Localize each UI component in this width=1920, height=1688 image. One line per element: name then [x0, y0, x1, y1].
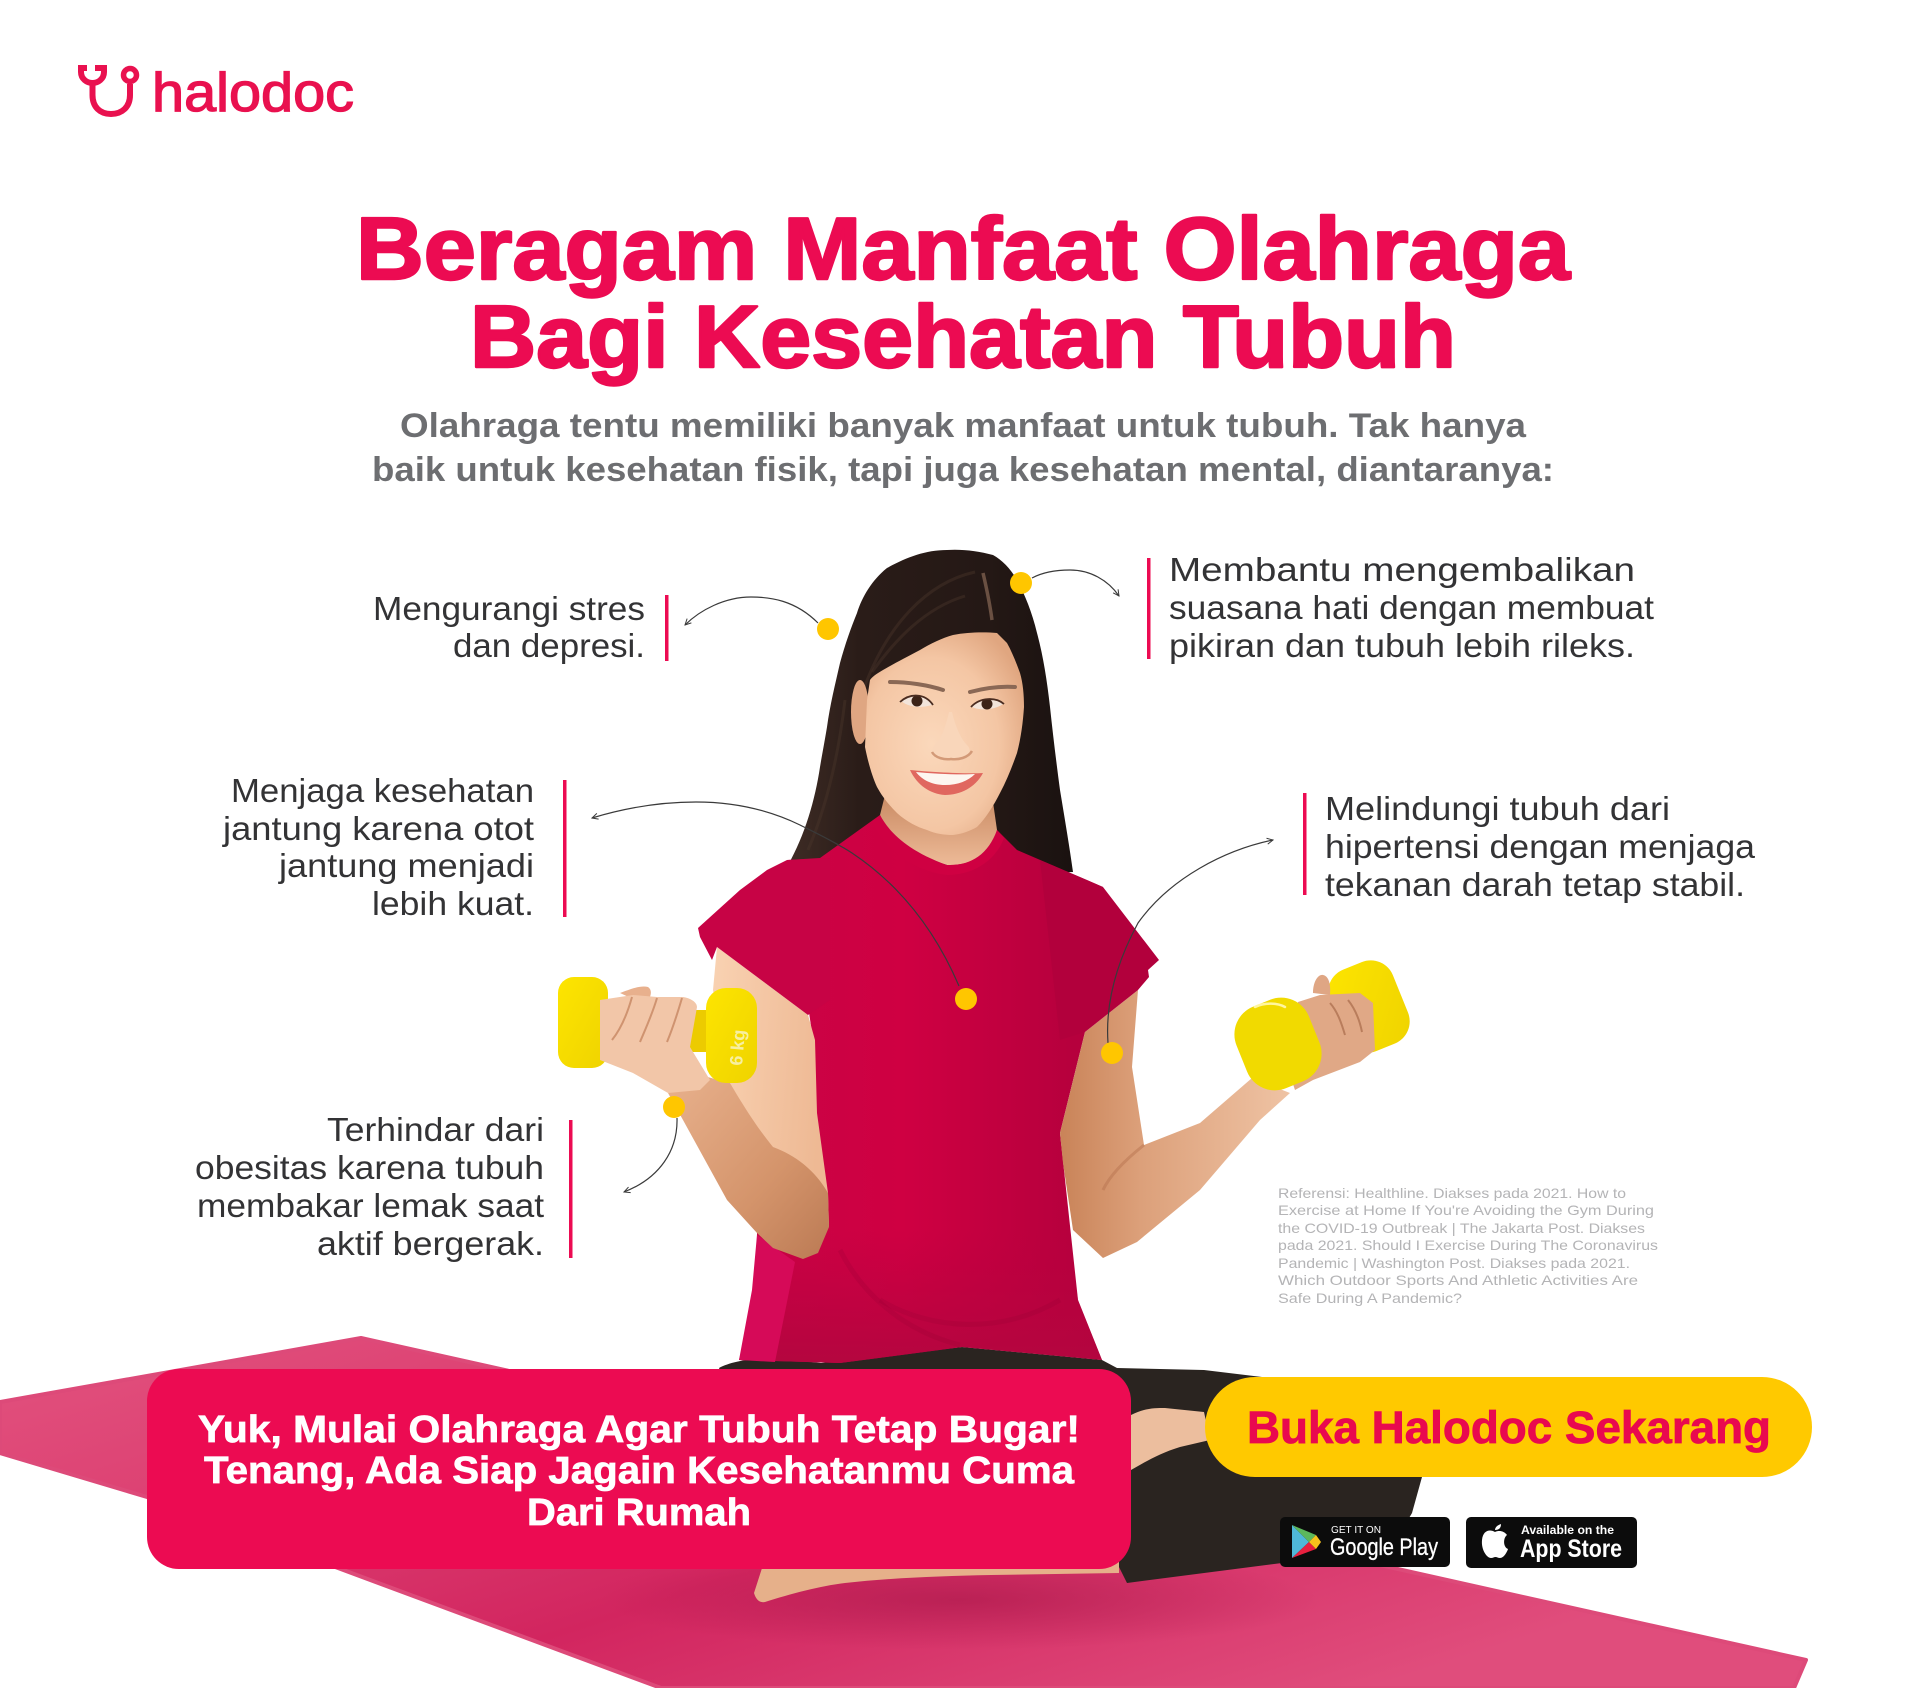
face	[865, 632, 1024, 835]
smile	[910, 770, 983, 795]
references: the COVID-19 Outbreak | The Jakarta Post. Diakses	[1278, 1220, 1645, 1236]
badge: app store: App Store	[1520, 1535, 1622, 1563]
panel: call to action	[147, 1369, 1131, 1569]
callout: hipertensi	[1101, 790, 1756, 1064]
text: Menjaga kesehatan	[231, 772, 534, 809]
text: suasana hati dengan membuat	[1169, 589, 1654, 626]
ear	[851, 680, 869, 744]
text: lebih kuat.	[372, 885, 534, 922]
badge: app store: Available on the	[1521, 1525, 1614, 1537]
sleeve right	[1040, 860, 1159, 1040]
references: Referensi: Healthline. Diakses pada 2021. How to	[1278, 1185, 1626, 1201]
nose	[932, 712, 972, 759]
yellow dot	[1010, 572, 1032, 594]
badge: google play	[1280, 1517, 1450, 1567]
sleeve left	[698, 858, 830, 1015]
text: hipertensi dengan menjaga	[1325, 828, 1756, 865]
button: buka halodoc: Buka Halodoc Sekarang	[1247, 1402, 1771, 1453]
yellow dot	[663, 1096, 685, 1118]
text	[373, 590, 645, 664]
left forearm	[668, 1075, 829, 1259]
text: Melindungi tubuh dari	[1325, 790, 1670, 827]
hair strands	[808, 572, 975, 850]
hair parting	[983, 573, 992, 620]
hand left	[600, 987, 710, 1093]
foot	[754, 1560, 1119, 1602]
callout: stres	[373, 590, 839, 664]
resting hand	[1131, 1408, 1210, 1470]
badge: google play: GET IT ON	[1331, 1524, 1381, 1536]
arrow curve	[592, 802, 959, 986]
shirt magenta side	[739, 1235, 795, 1362]
accent bar	[1147, 558, 1150, 659]
arrow curve	[1108, 840, 1273, 1043]
person	[558, 550, 1422, 1602]
references: Safe During A Pandemic?	[1278, 1290, 1462, 1306]
shirt folds	[840, 1250, 1060, 1345]
subtitle	[372, 407, 1554, 489]
arrow curve	[1032, 570, 1119, 596]
dumbbell left	[558, 977, 757, 1083]
title	[356, 199, 1571, 386]
text: aktif bergerak.	[317, 1225, 544, 1262]
pants	[719, 1347, 1422, 1583]
eyebrows	[890, 682, 1015, 692]
text: Mengurangi stres	[373, 590, 645, 627]
text	[1169, 551, 1654, 664]
right arm	[1060, 990, 1290, 1258]
right arm crease	[1103, 1145, 1144, 1190]
icon: play triangle	[1292, 1525, 1321, 1558]
text: obesitas karena tubuh	[195, 1149, 544, 1186]
callout: jantung	[222, 772, 977, 1010]
shirt body	[739, 815, 1103, 1363]
logo wordmark: halodoc	[152, 61, 354, 123]
arrow curve	[685, 597, 818, 625]
left upper arm	[713, 947, 829, 1227]
call to action text: Yuk, Mulai Olahraga Agar Tubuh Tetap Bugar!	[198, 1409, 1080, 1451]
button: buka halodoc	[1205, 1377, 1812, 1477]
subtitle: baik untuk kesehatan fisik, tapi juga kesehatan mental, diantaranya:	[372, 451, 1554, 489]
badge: app store	[1466, 1517, 1637, 1568]
yellow dot	[1101, 1042, 1123, 1064]
text	[222, 772, 534, 922]
text: Membantu mengembalikan	[1169, 551, 1635, 588]
text: membakar lemak saat	[197, 1187, 544, 1224]
icon: apple	[1482, 1524, 1508, 1558]
subtitle: Olahraga tentu memiliki banyak manfaat untuk tubuh. Tak hanya	[400, 407, 1527, 445]
text: dan depresi.	[453, 627, 645, 664]
dumbbell left: 6 kg	[726, 1029, 749, 1066]
dumbbell right far bell	[1321, 953, 1417, 1060]
references	[1278, 1185, 1658, 1306]
text: jantung menjadi	[278, 847, 534, 884]
accent bar	[1303, 793, 1306, 895]
eyes	[900, 696, 1004, 710]
collar	[872, 815, 1004, 875]
accent bar	[569, 1120, 572, 1258]
callout: suasana hati	[1010, 551, 1654, 664]
hand right	[1285, 975, 1375, 1090]
callout: obesitas	[195, 1096, 685, 1262]
call to action text	[198, 1409, 1080, 1534]
references: Pandemic | Washington Post. Diakses pada 2021.	[1278, 1255, 1630, 1271]
title: Bagi Kesehatan Tubuh	[470, 287, 1456, 386]
yellow dot	[955, 988, 977, 1010]
dumbbell right near bell	[1225, 989, 1331, 1099]
hair back	[788, 550, 1073, 880]
neck	[880, 795, 997, 865]
call to action text: Tenang, Ada Siap Jagain Kesehatanmu Cuma	[204, 1450, 1075, 1492]
references: Exercise at Home If You're Avoiding the Gym During	[1278, 1202, 1654, 1218]
text	[1325, 790, 1756, 903]
text: Terhindar dari	[327, 1111, 544, 1148]
text: tekanan darah tetap stabil.	[1325, 866, 1745, 903]
text	[195, 1111, 544, 1262]
title: Beragam Manfaat Olahraga	[356, 199, 1571, 298]
accent bar	[563, 780, 566, 917]
text: jantung karena otot	[222, 810, 534, 847]
references: Which Outdoor Sports And Athletic Activities Are	[1278, 1272, 1638, 1288]
yoga mat	[0, 1338, 1806, 1688]
icon: stethoscope	[81, 68, 136, 114]
shirt lower shade	[739, 1230, 1102, 1363]
text: pikiran dan tubuh lebih rileks.	[1169, 627, 1635, 664]
arrow curve	[624, 1118, 677, 1192]
accent bar	[665, 595, 668, 661]
logo: halodoc	[81, 61, 354, 123]
call to action text: Dari Rumah	[527, 1492, 751, 1534]
mat shadow	[600, 1550, 1320, 1650]
yellow dot	[817, 618, 839, 640]
references: pada 2021. Should I Exercise During The Coronavirus	[1278, 1237, 1658, 1253]
badge: google play: Google Play	[1330, 1534, 1438, 1561]
